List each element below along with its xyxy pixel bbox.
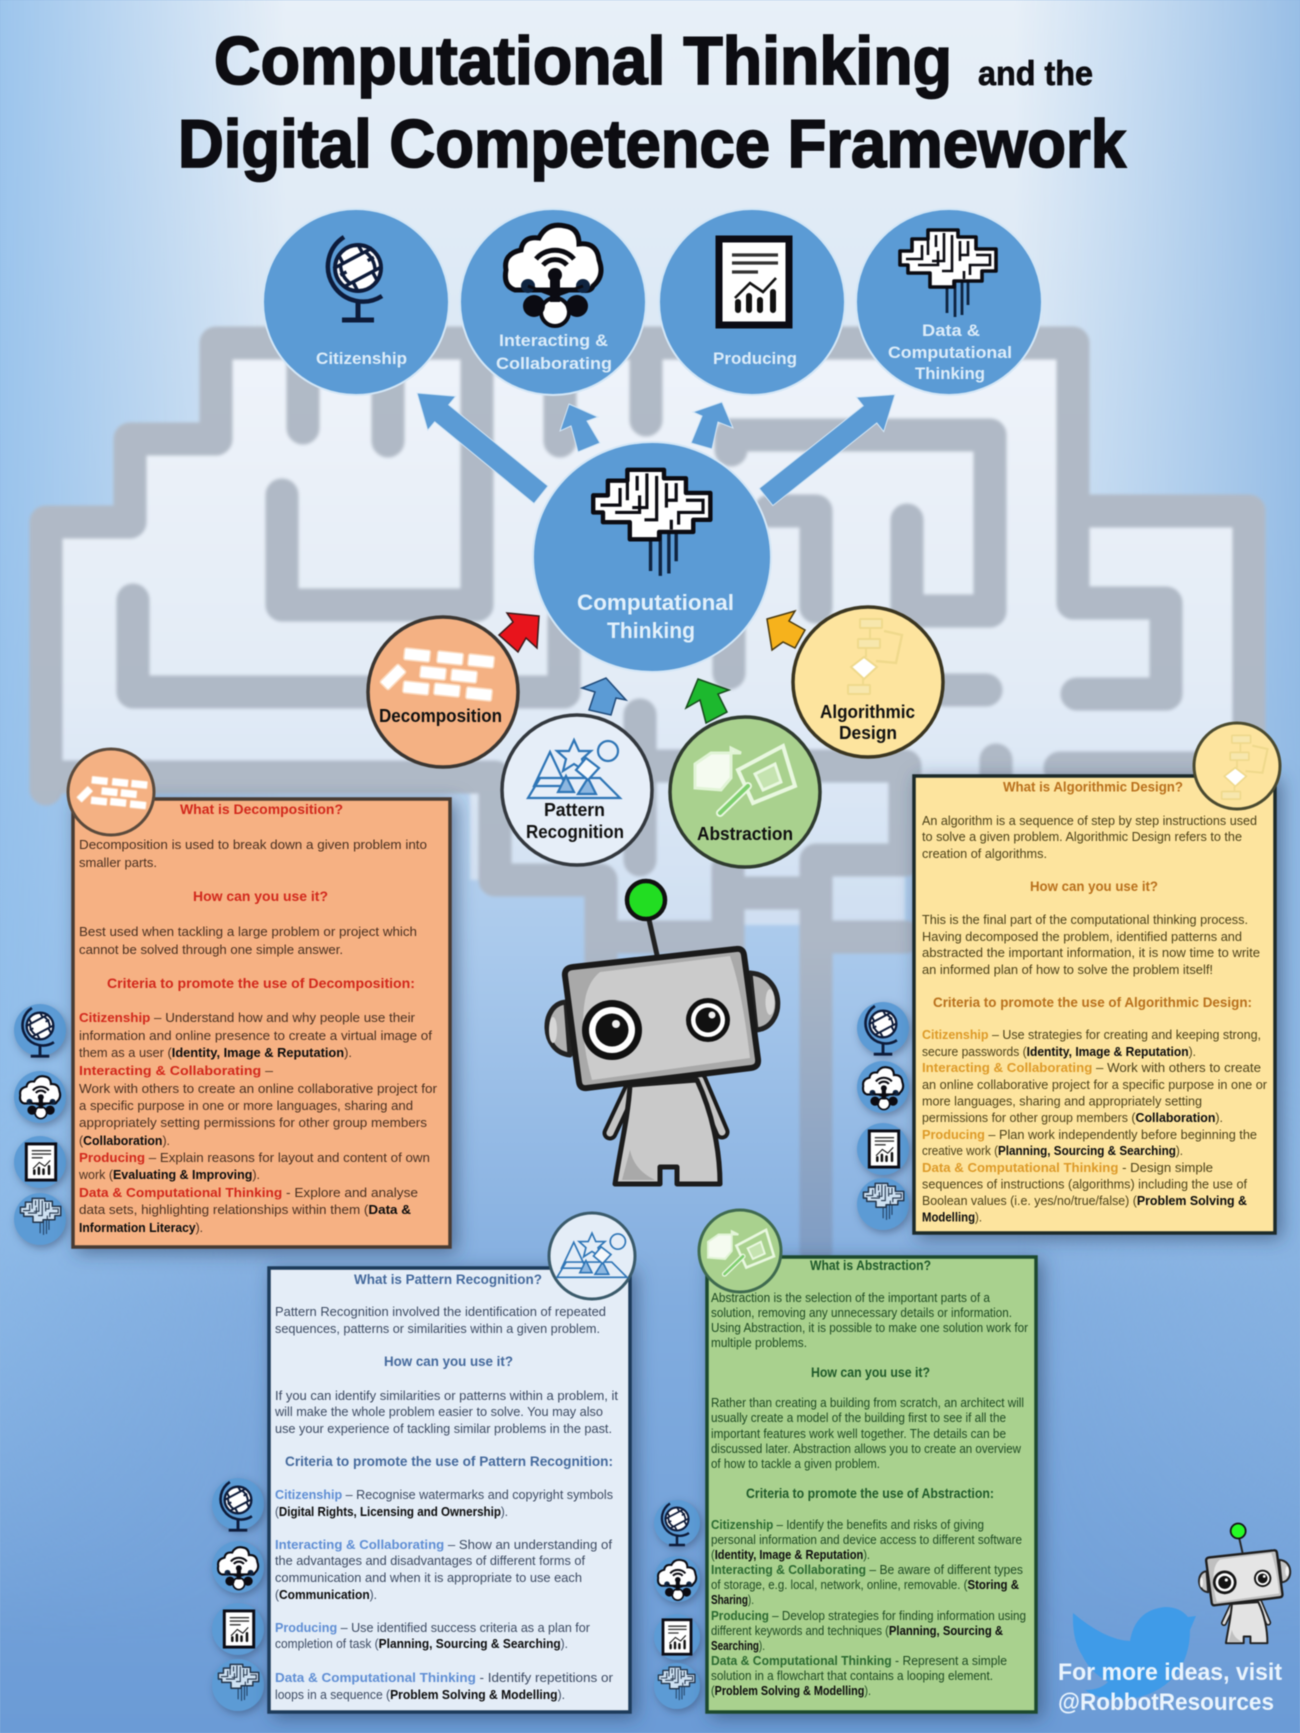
text: usage: abstracted the important information, it is now time to write	[922, 945, 1260, 960]
text: usage: of how to tackle a given problem.	[711, 1456, 880, 1471]
icon: cloud network	[505, 225, 601, 326]
text: criteria list: sequences of instructions (algorithms) including the use of	[922, 1176, 1247, 1192]
text: criteria list: secure passwords (Identity, Image & Reputation).	[922, 1044, 1196, 1059]
icon: shapes	[528, 740, 620, 798]
label: Interacting and Collaborating: Collaborating	[496, 354, 612, 373]
label: Pattern Recognition: Recognition	[526, 822, 624, 842]
badge: pattern recognition	[549, 1213, 635, 1299]
text: usage: Rather than creating a building from scratch, an architect will	[711, 1395, 1024, 1410]
arrow: to Citizenship	[417, 393, 548, 504]
text: usage: an informed plan of how to solve the problem itself!	[922, 962, 1213, 977]
label: Producing: Producing	[713, 349, 797, 368]
callout: more ideas	[1058, 1659, 1282, 1716]
panel: Pattern Recognition	[269, 1213, 635, 1712]
side icons: pattern recognition panel	[212, 1478, 264, 1711]
circle: Abstraction	[670, 717, 820, 867]
text: criteria list	[922, 1027, 1268, 1224]
circle: Producing	[659, 209, 845, 395]
background maze	[46, 343, 1249, 1250]
panel: Decomposition	[68, 749, 450, 1247]
text: criteria list	[711, 1517, 1026, 1698]
arrow: to Data and Computational Thinking	[759, 394, 895, 506]
text: criteria list: Boolean values (i.e. yes/no/true/false) (Problem Solving &	[922, 1193, 1247, 1208]
side icons: abstraction panel	[654, 1500, 700, 1709]
side icons: algorithmic design panel	[857, 1002, 909, 1230]
label: Algorithmic Design: Design	[839, 723, 897, 743]
icon: circuit brain	[900, 230, 996, 317]
text: usage	[274, 1388, 618, 1436]
text: criteria list: them as a user (Identity, Image & Reputation).	[79, 1045, 352, 1060]
label: Computational Thinking: Thinking	[607, 618, 695, 643]
label: Computational Thinking: Computational	[577, 590, 734, 615]
icon: circuit brain	[593, 470, 710, 576]
arrow: to Interacting and Collaborating	[560, 404, 600, 452]
label: Pattern Recognition	[526, 800, 624, 842]
heading: criteria: Criteria to promote the use of Algorithmic Design:	[933, 995, 1252, 1010]
text: criteria list: Citizenship – Understand how and why people use their	[79, 1010, 416, 1025]
text: usage: If you can identify similarities or patterns within a problem, it	[275, 1388, 618, 1403]
text: criteria list: work (Evaluating & Improving).	[78, 1167, 260, 1182]
label: Data and Computational Thinking: Thinking	[915, 364, 985, 383]
text: usage	[711, 1395, 1024, 1471]
title	[178, 23, 1126, 182]
panel: Algorithmic Design	[914, 723, 1280, 1233]
arrow: pattern recognition blue	[582, 678, 626, 715]
callout: more ideas: For more ideas, visit	[1058, 1659, 1282, 1686]
icon: document with chart	[719, 239, 789, 325]
text: criteria list: loops in a sequence (Problem Solving & Modelling).	[275, 1687, 565, 1702]
text: definition	[922, 813, 1257, 861]
text: criteria list: a specific purpose in one or more languages, sharing and	[79, 1098, 413, 1113]
text: criteria list: Producing – Plan work independently before beginning the	[922, 1127, 1257, 1142]
title: and the	[978, 55, 1093, 93]
text: criteria list: Information Literacy).	[79, 1220, 203, 1235]
text: criteria list: Sharing).	[711, 1592, 754, 1607]
text: criteria list: Producing – Develop strategies for finding information using	[711, 1608, 1026, 1623]
label: Computational Thinking	[577, 590, 734, 643]
heading: How can you use it?: How can you use it?	[1030, 879, 1158, 894]
text: usage: important features work well together. The details can be	[711, 1426, 1006, 1441]
text: definition: solution, removing any unnecessary details or information.	[711, 1305, 1012, 1320]
text: criteria list: Citizenship – Recognise watermarks and copyright symbols	[275, 1487, 613, 1502]
text: criteria list: Modelling).	[922, 1210, 982, 1224]
heading: What is Algorithmic Design?: What is Algorithmic Design?	[1003, 780, 1183, 794]
badge: abstraction	[699, 1210, 781, 1292]
heading: criteria: Criteria to promote the use of Decomposition:	[107, 976, 415, 991]
robot mascot	[547, 881, 778, 1184]
icon: flowchart	[848, 619, 902, 694]
text: criteria list: Interacting & Collaborating –	[79, 1063, 274, 1078]
text: criteria list: Data & Computational Thinking - Design simple	[922, 1160, 1213, 1175]
text: criteria list: the advantages and disadvantages of different forms of	[275, 1553, 585, 1568]
text: usage: will make the whole problem easier to solve. You may also	[274, 1404, 603, 1419]
text: criteria list: Data & Computational Thinking - Represent a simple	[711, 1653, 1007, 1668]
text: criteria list: data sets, highlighting relationships within them ( Data &	[79, 1202, 411, 1217]
label: Interacting and Collaborating	[496, 331, 612, 373]
badge: decomposition	[68, 749, 154, 835]
text: criteria list: communication and when it is appropriate to use each	[275, 1570, 582, 1585]
icon: abstract cube and wrench	[695, 746, 795, 813]
text: criteria list: (Collaboration).	[79, 1133, 170, 1148]
icon: globe	[328, 237, 387, 320]
text: usage: This is the final part of the computational thinking process.	[922, 912, 1248, 927]
text: usage: use your experience of tackling similar problems in the past.	[275, 1421, 612, 1436]
text: definition: creation of algorithms.	[922, 846, 1047, 861]
text: usage: Best used when tackling a large problem or project which	[79, 924, 417, 939]
label: Interacting and Collaborating: Interacting &	[499, 331, 608, 350]
circle: Citizenship	[263, 209, 449, 395]
circle: Pattern Recognition	[502, 715, 652, 865]
heading: What is Abstraction?: What is Abstraction?	[810, 1258, 931, 1273]
label: Data and Computational Thinking: Computational	[888, 343, 1012, 362]
text: usage	[922, 912, 1260, 977]
text: criteria list: more languages, sharing and appropriately setting	[922, 1094, 1202, 1108]
text: definition: Abstraction is the selection of the important parts of a	[711, 1290, 991, 1305]
heading: What is Pattern Recognition?: What is Pattern Recognition?	[354, 1272, 542, 1287]
text: criteria list: completion of task (Planning, Sourcing & Searching).	[275, 1636, 568, 1651]
circle: Computational Thinking	[533, 442, 771, 672]
text: usage: discussed later. Abstraction allows you to create an overview	[711, 1441, 1022, 1456]
heading: How can you use it?: How can you use it?	[811, 1365, 930, 1380]
text: criteria list: Citizenship – Identify the benefits and risks of giving	[711, 1517, 984, 1532]
label: Citizenship: Citizenship	[316, 349, 407, 368]
text: criteria list: (Digital Rights, Licensing and Ownership).	[275, 1504, 508, 1519]
arrow: to Producing	[691, 402, 733, 449]
text: criteria list: different keywords and techniques (Planning, Sourcing &	[711, 1623, 1003, 1638]
label: Abstraction: Abstraction	[697, 824, 793, 844]
text: criteria list: appropriately setting permissions for other group members	[79, 1115, 428, 1130]
text: definition	[711, 1290, 1029, 1350]
title: Computational Thinking	[214, 23, 952, 99]
text: criteria list: solution in a flowchart that contains a looping element.	[711, 1668, 993, 1683]
text: definition: Decomposition is used to break down a given problem into	[79, 837, 427, 852]
text: criteria list: Interacting & Collaborating – Show an understanding of	[275, 1537, 612, 1552]
label: Algorithmic Design: Algorithmic	[820, 702, 915, 722]
heading: How can you use it?: How can you use it?	[384, 1354, 513, 1369]
heading: How can you use it?: How can you use it?	[193, 889, 328, 904]
text: criteria list: Data & Computational Thinking - Identify repetitions or	[275, 1670, 614, 1685]
label: Data and Computational Thinking: Data &	[922, 321, 980, 340]
callout: more ideas: @RobbotResources	[1058, 1689, 1274, 1716]
heading: criteria: Criteria to promote the use of Pattern Recognition:	[285, 1454, 613, 1469]
text: criteria list: (Problem Solving & Modelling).	[711, 1683, 871, 1698]
text: definition	[275, 1304, 606, 1336]
text: definition: sequences, patterns or similarities within a given problem.	[275, 1321, 600, 1336]
circle: Decomposition	[368, 617, 518, 767]
heading: What is Decomposition?: What is Decomposition?	[180, 802, 343, 817]
text: definition: Using Abstraction, it is possible to make one solution work for	[711, 1320, 1029, 1335]
text: definition: to solve a given problem. Algorithmic Design refers to the	[922, 829, 1242, 844]
text: definition	[79, 837, 427, 870]
arrow: abstraction green	[686, 679, 729, 723]
text: definition: Pattern Recognition involved the identification of repeated	[275, 1304, 606, 1319]
text: usage: Having decomposed the problem, identified patterns and	[922, 929, 1242, 944]
heading: criteria: Criteria to promote the use of Abstraction:	[746, 1486, 994, 1501]
text: usage: cannot be solved through one simple answer.	[79, 942, 343, 957]
circle: Data and Computational Thinking	[856, 209, 1042, 395]
text: criteria list: Work with others to create an online collaborative project for	[79, 1081, 438, 1096]
label: Data and Computational Thinking	[888, 321, 1012, 383]
text: criteria list: Interacting & Collaborating – Work with others to create	[922, 1060, 1261, 1075]
text: criteria list	[78, 1010, 438, 1235]
text: criteria list	[275, 1487, 614, 1702]
text: criteria list: Data & Computational Thinking - Explore and analyse	[79, 1185, 418, 1200]
text: criteria list: personal information and device access to different software	[711, 1532, 1022, 1547]
panel: Abstraction	[699, 1210, 1036, 1712]
text: definition: multiple problems.	[711, 1335, 807, 1350]
text: criteria list: Searching).	[711, 1638, 765, 1653]
small robot mascot	[1199, 1523, 1290, 1643]
arrow: algorithmic design orange	[767, 611, 805, 650]
circle: Interacting and Collaborating	[460, 209, 646, 395]
icon: bricks	[380, 648, 495, 701]
text: definition: smaller parts.	[79, 855, 157, 870]
text: criteria list: Interacting & Collaborating – Be aware of different types	[711, 1562, 1023, 1577]
title: Digital Competence Framework	[178, 106, 1126, 182]
text: criteria list: Producing – Explain reasons for layout and content of own	[79, 1150, 430, 1165]
arrow: decomposition red	[499, 613, 539, 652]
text: criteria list: Producing – Use identified success criteria as a plan for	[275, 1620, 591, 1635]
text: criteria list: Citizenship – Use strategies for creating and keeping strong,	[922, 1027, 1261, 1042]
text: criteria list: (Communication).	[275, 1587, 377, 1602]
text: criteria list: permissions for other group members (Collaboration).	[922, 1110, 1223, 1125]
text: criteria list: creative work (Planning, Sourcing & Searching).	[922, 1143, 1183, 1158]
label: Decomposition: Decomposition	[379, 706, 502, 726]
text: criteria list: of storage, e.g. local, network, online, removable. (Storing &	[711, 1577, 1019, 1592]
text: criteria list: an online collaborative project for a specific purpose in one or	[922, 1077, 1268, 1092]
icon: twitter bird	[1073, 1607, 1196, 1700]
text: criteria list: information and online presence to create a virtual image of	[79, 1028, 432, 1043]
label: Algorithmic Design	[820, 702, 915, 743]
text: usage: usually create a model of the building first to see if all the	[711, 1410, 1006, 1425]
badge: algorithmic design	[1194, 723, 1280, 809]
circle: Algorithmic Design	[793, 607, 943, 757]
text: definition: An algorithm is a sequence of step by step instructions used	[922, 813, 1257, 828]
side icons: decomposition panel	[14, 1004, 66, 1245]
label: Pattern Recognition: Pattern	[544, 800, 605, 820]
text: usage	[79, 924, 417, 957]
text: criteria list: (Identity, Image & Reputation).	[711, 1547, 870, 1562]
